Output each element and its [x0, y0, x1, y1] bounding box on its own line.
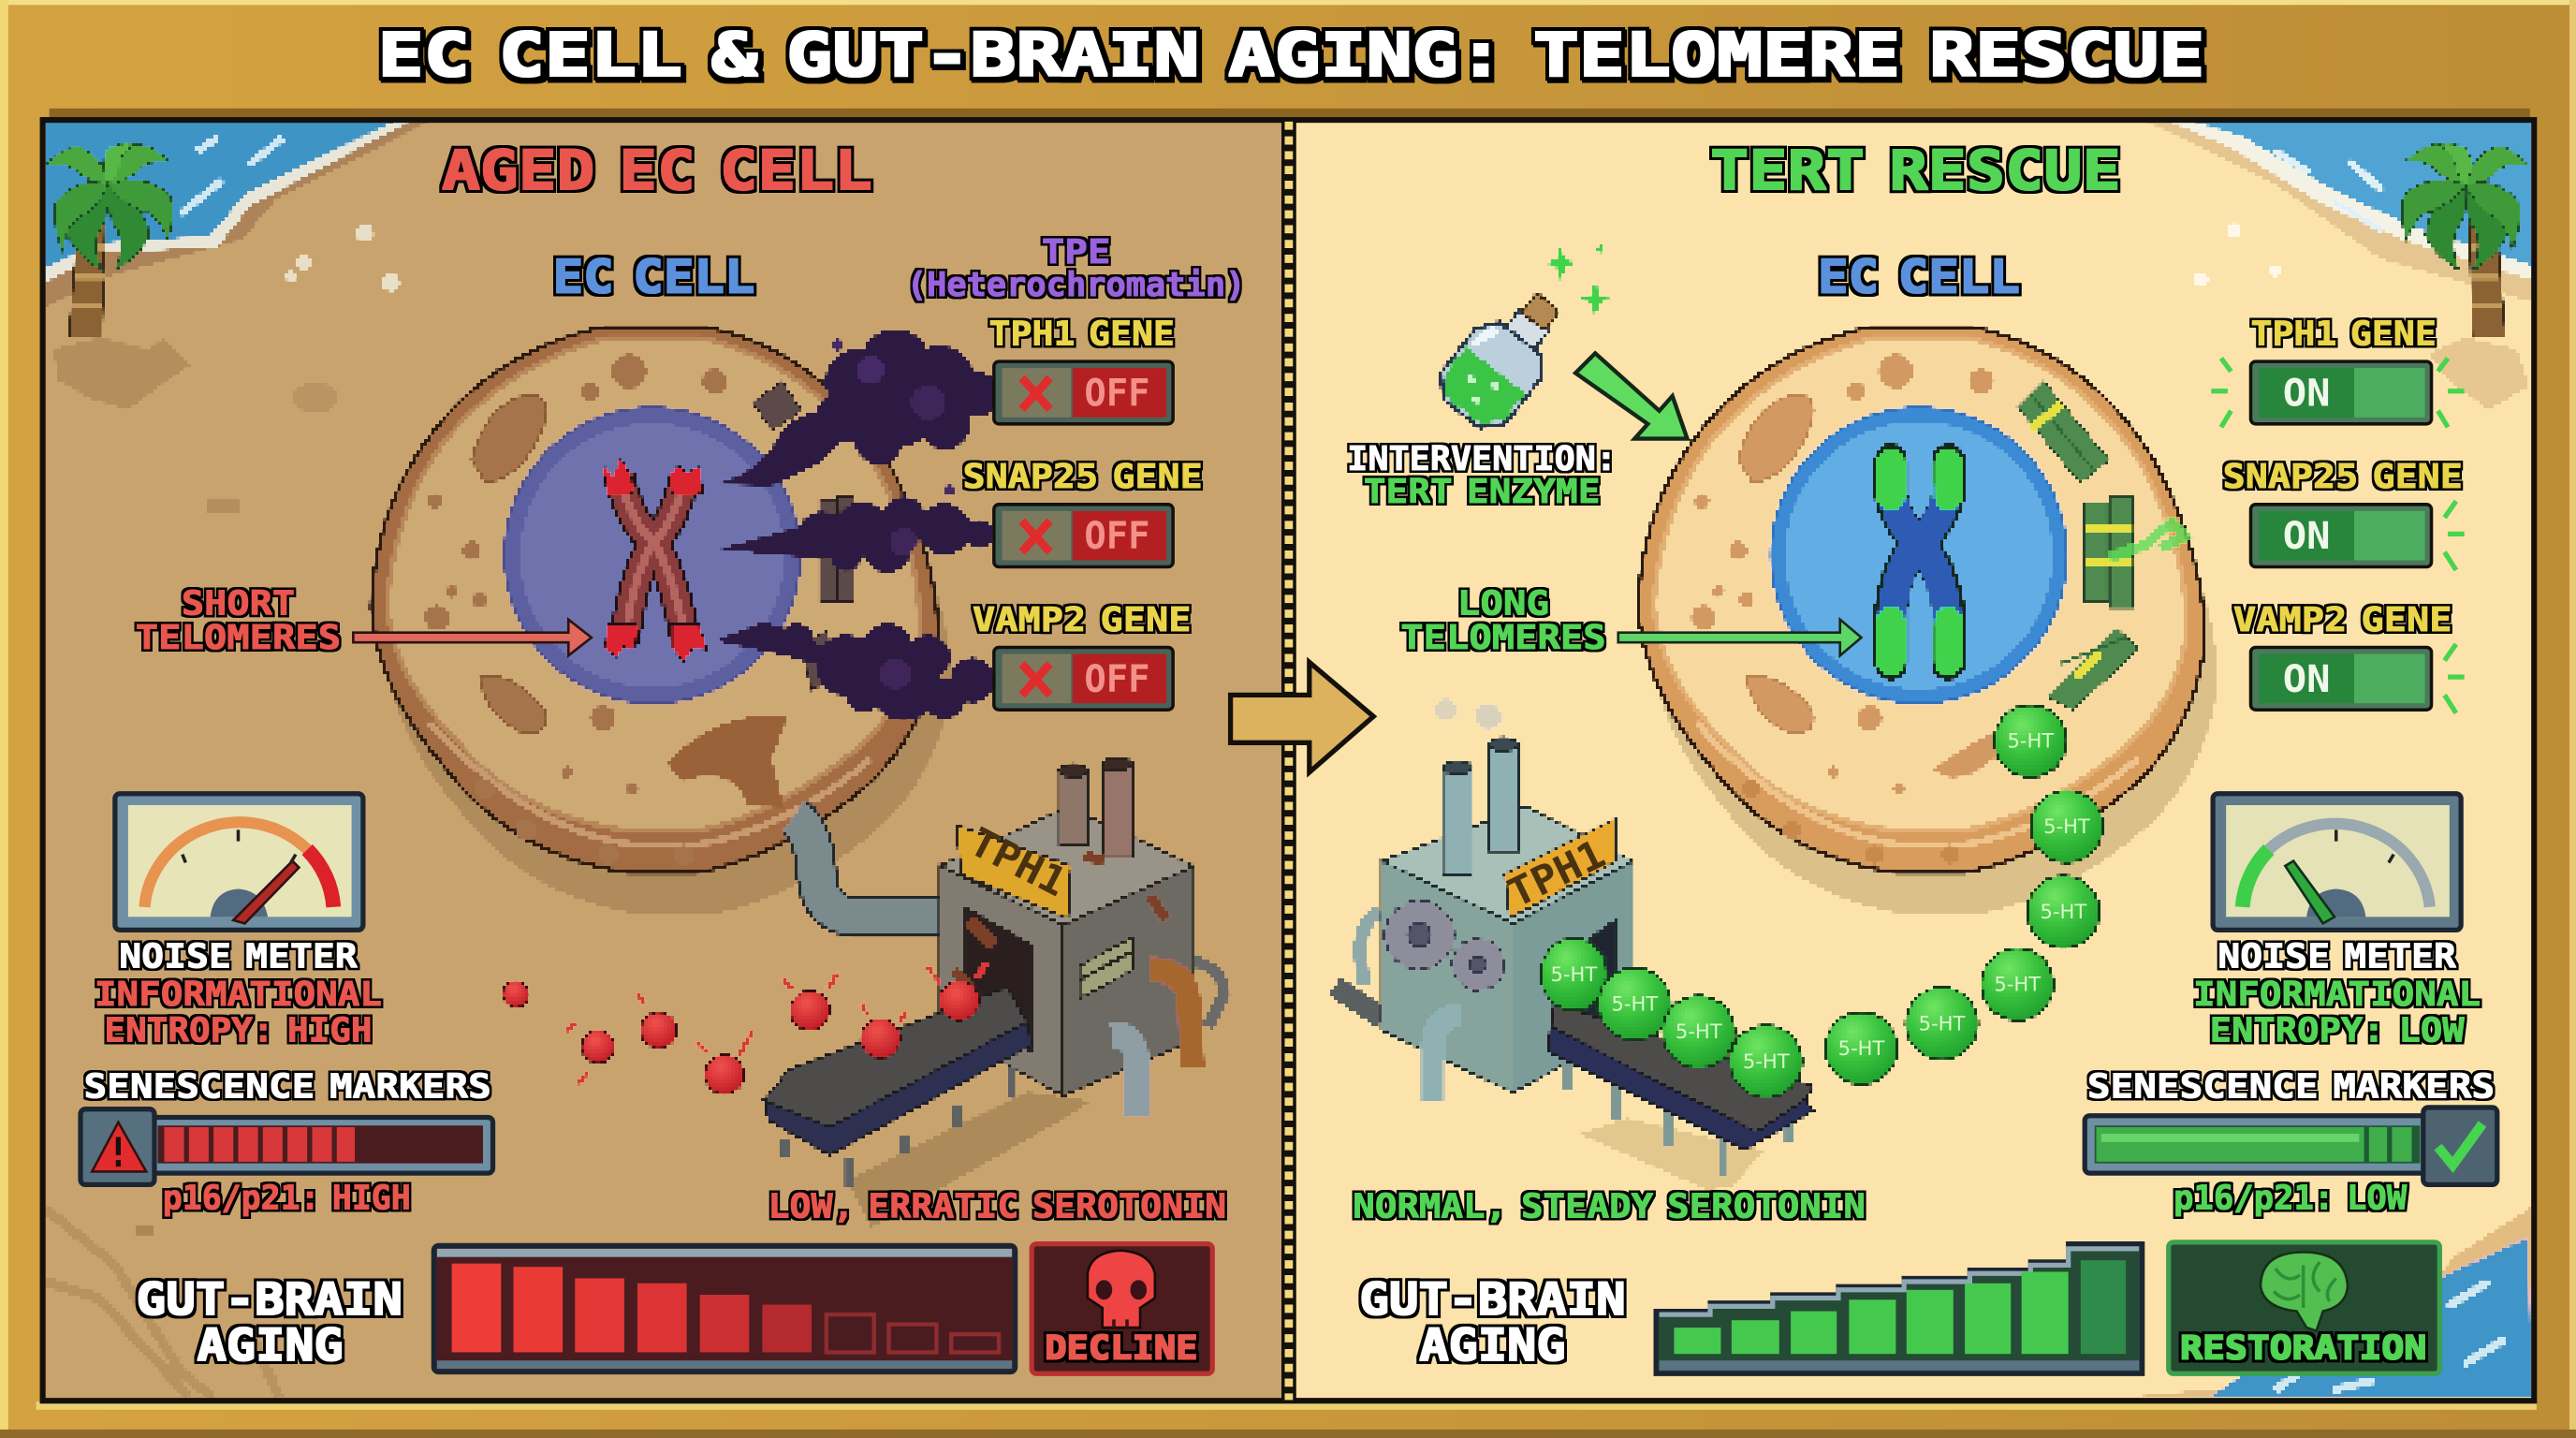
- label: p16/p21 high: p16/p21: HIGH: [163, 1180, 411, 1218]
- organelles: [424, 353, 788, 864]
- gauge: noise meter high: [115, 794, 363, 930]
- label: TPE: TPE: [1042, 233, 1110, 271]
- label: TPH1 gene on: TPH1 GENE: [2250, 315, 2437, 354]
- TPE heterochromatin smoke: [710, 329, 1001, 721]
- nucleus: [505, 407, 800, 703]
- label: short telomeres: SHORT: [182, 584, 295, 623]
- icon: glow ticks TPH1: [2211, 359, 2465, 427]
- smoke cloud: TPH1: [710, 329, 1001, 487]
- icon: sparkles: [1544, 240, 1612, 318]
- serotonin sphere labels: 5-HT: [2041, 900, 2086, 923]
- label: short telomeres: TELOMERES: [136, 619, 341, 657]
- label: entropy high: [95, 976, 382, 1050]
- bar: senescence low: [2085, 1108, 2497, 1184]
- serotonin sphere labels: 5-HT: [1838, 1036, 1885, 1060]
- factory body: [940, 757, 1194, 1096]
- label: gut-brain aging right: GUT-BRAIN: [1359, 1274, 1626, 1326]
- label: entropy high: ENTROPY: HIGH: [104, 1012, 373, 1050]
- label: gut-brain aging left: AGING: [198, 1320, 344, 1372]
- arrow: short telomeres: [353, 620, 592, 655]
- cell shadow right: [1651, 370, 2217, 916]
- heading: aged EC cell: AGED EC CELL: [442, 139, 872, 202]
- label: SNAP25 gene on: SNAP25 GENE: [2223, 458, 2463, 496]
- beach and water, top right: [2145, 122, 2532, 302]
- arrow: long telomeres: [1618, 620, 1862, 655]
- toggle: VAMP2 on: [2250, 648, 2432, 710]
- bar chart: rising: [1656, 1244, 2143, 1373]
- icon: skull: [1088, 1251, 1155, 1328]
- factory body: [1382, 738, 1633, 1093]
- label: intervention: INTERVENTION:: [1347, 440, 1617, 478]
- label: TPH1 gene off: TPH1 GENE: [989, 315, 1175, 354]
- label: gut-brain aging right: AGING: [1419, 1320, 1566, 1372]
- label: gut-brain aging left: [137, 1274, 402, 1372]
- OFF text: OFF: [1084, 514, 1150, 558]
- beach details, sand marks: [44, 225, 399, 1399]
- bar chart: declining: [433, 1245, 1016, 1372]
- label: VAMP2 gene on: VAMP2 GENE: [2233, 601, 2452, 639]
- label: short telomeres: [136, 584, 341, 657]
- label: long telomeres: LONG: [1457, 584, 1549, 623]
- label: entropy low: [2193, 976, 2481, 1050]
- icon: palm tree right: [2392, 135, 2531, 337]
- heading: EC cell left: EC CELL: [553, 249, 754, 303]
- serotonin sphere labels: 5-HT: [1919, 1011, 1966, 1034]
- badge: decline: [1032, 1244, 1212, 1373]
- serotonin sphere labels: 5-HT: [2007, 729, 2054, 753]
- sign text: TPH1 damaged: TPH1: [962, 818, 1074, 905]
- arrow: aged to rescue: [1231, 662, 1373, 772]
- conveyor belt: [1547, 1004, 1814, 1177]
- label: heterochromatin: (Heterochromatin): [907, 266, 1245, 304]
- TERT rescue cell diagram: [1638, 327, 2204, 873]
- beach and water, top left: [44, 122, 431, 309]
- ON text: ON: [2283, 372, 2331, 416]
- heading: EC cell right: EC CELL: [1818, 249, 2020, 303]
- chromosome with long telomeres: [1891, 460, 1949, 664]
- toggle: SNAP25 off: [994, 505, 1173, 567]
- pipe: [794, 816, 940, 917]
- active gene bars: [2017, 381, 2185, 710]
- toggle: TPH1 on: [2250, 361, 2432, 424]
- serotonin sphere labels: 5-HT: [1743, 1049, 1790, 1073]
- icon: palm shadow and sand marks: [2195, 224, 2530, 411]
- nucleus: [1771, 407, 2067, 703]
- cell shadow left: [385, 370, 951, 916]
- label: gut-brain aging right: [1359, 1274, 1626, 1372]
- smoke cloud: VAMP2: [713, 621, 996, 721]
- cell body: [372, 327, 938, 873]
- label: senescence right: SENESCENCE MARKERS: [2087, 1067, 2495, 1106]
- label: long telomeres: [1400, 584, 1606, 657]
- ON text: ON: [2283, 514, 2331, 558]
- gauge: noise meter low: [2213, 794, 2461, 930]
- factory: TPH1 healthy: [1334, 738, 1814, 1191]
- label: entropy low: INFORMATIONAL: [2193, 976, 2481, 1014]
- serotonin sphere labels: 5-HT: [1994, 972, 2041, 995]
- title: EC CELL & GUT-BRAIN AGING: TELOMERE RESCUE: [378, 21, 2204, 90]
- conveyor shadow: [1577, 1117, 1766, 1191]
- toggle: SNAP25 on: [2250, 505, 2432, 567]
- label: senescence left: SENESCENCE MARKERS: [84, 1067, 491, 1106]
- repressed gene bars: [753, 381, 855, 690]
- icon: glow ticks SNAP25: [2445, 501, 2465, 570]
- serotonin sphere labels: [1551, 729, 2090, 1073]
- OFF text: OFF: [1084, 372, 1150, 416]
- serotonin particles erratic: [503, 962, 986, 1094]
- outlet pipe: [1432, 1016, 1462, 1101]
- label: long telomeres: TELOMERES: [1400, 619, 1606, 657]
- gears: [1385, 901, 1505, 990]
- icon: TERT potion bottle: [1429, 277, 1581, 439]
- heading: TERT rescue: TERT RESCUE: [1710, 139, 2121, 202]
- label: intervention: [1347, 440, 1617, 511]
- icon: brain: [2261, 1252, 2348, 1331]
- conveyor belt: [764, 988, 1032, 1186]
- label: noise meter right: NOISE METER: [2217, 938, 2456, 976]
- label: entropy low: ENTROPY: LOW: [2210, 1012, 2465, 1050]
- toggle: TPH1 off: [994, 361, 1173, 424]
- label: normal steady serotonin: NORMAL, STEADY SEROTONIN: [1353, 1188, 1866, 1226]
- cell body: [1638, 327, 2204, 873]
- serotonin spheres steady: [1541, 705, 2103, 1097]
- serotonin sphere labels: 5-HT: [1611, 991, 1658, 1015]
- smoke cloud: SNAP25: [718, 484, 994, 574]
- panel: aged EC cell: [44, 122, 1288, 1400]
- serotonin sphere labels: 5-HT: [2043, 814, 2090, 838]
- beach and water, bottom right: [2110, 1206, 2532, 1399]
- icon: gray exhaust puffs: [1434, 698, 1501, 729]
- label: VAMP2 gene off: VAMP2 GENE: [973, 601, 1191, 639]
- toggle: VAMP2 off: [994, 648, 1173, 710]
- organelles: [1690, 353, 2023, 864]
- icon: glow ticks VAMP2: [2445, 644, 2465, 713]
- back pipes: [1334, 912, 1383, 1019]
- factory: TPH1 damaged: [764, 757, 1224, 1229]
- aged EC cell diagram: [372, 327, 1001, 873]
- label: SNAP25 gene off: SNAP25 GENE: [962, 458, 1203, 496]
- label: entropy high: INFORMATIONAL: [95, 976, 382, 1014]
- serotonin sphere labels: 5-HT: [1676, 1020, 1722, 1043]
- OFF text: OFF: [1084, 657, 1150, 701]
- label: intervention: TERT ENZYME: [1364, 473, 1600, 511]
- label: low erratic serotonin: LOW, ERRATIC SEROTONIN: [768, 1188, 1226, 1226]
- label: p16/p21 low: p16/p21: LOW: [2174, 1180, 2408, 1218]
- label: gut-brain aging left: GUT-BRAIN: [137, 1274, 402, 1326]
- serotonin sphere labels: 5-HT: [1551, 962, 1597, 986]
- ON text: ON: [2283, 657, 2331, 701]
- DECLINE text: DECLINE: [1045, 1328, 1197, 1367]
- conveyor shadow: [846, 1091, 1092, 1229]
- bar: senescence high: [80, 1109, 493, 1184]
- label: noise meter left: NOISE METER: [119, 938, 358, 976]
- chromosome with short telomeres: [603, 459, 708, 662]
- badge: restoration: [2169, 1242, 2439, 1373]
- arrow: potion into cell: [1575, 353, 1687, 439]
- icon: palm tree left: [44, 135, 183, 337]
- panel: TERT rescue: [1288, 122, 2533, 1400]
- RESTORATION text: RESTORATION: [2180, 1328, 2426, 1367]
- outlet pipes and rust: [953, 855, 1224, 1117]
- sign text: TPH1 healthy: TPH1: [1500, 830, 1612, 917]
